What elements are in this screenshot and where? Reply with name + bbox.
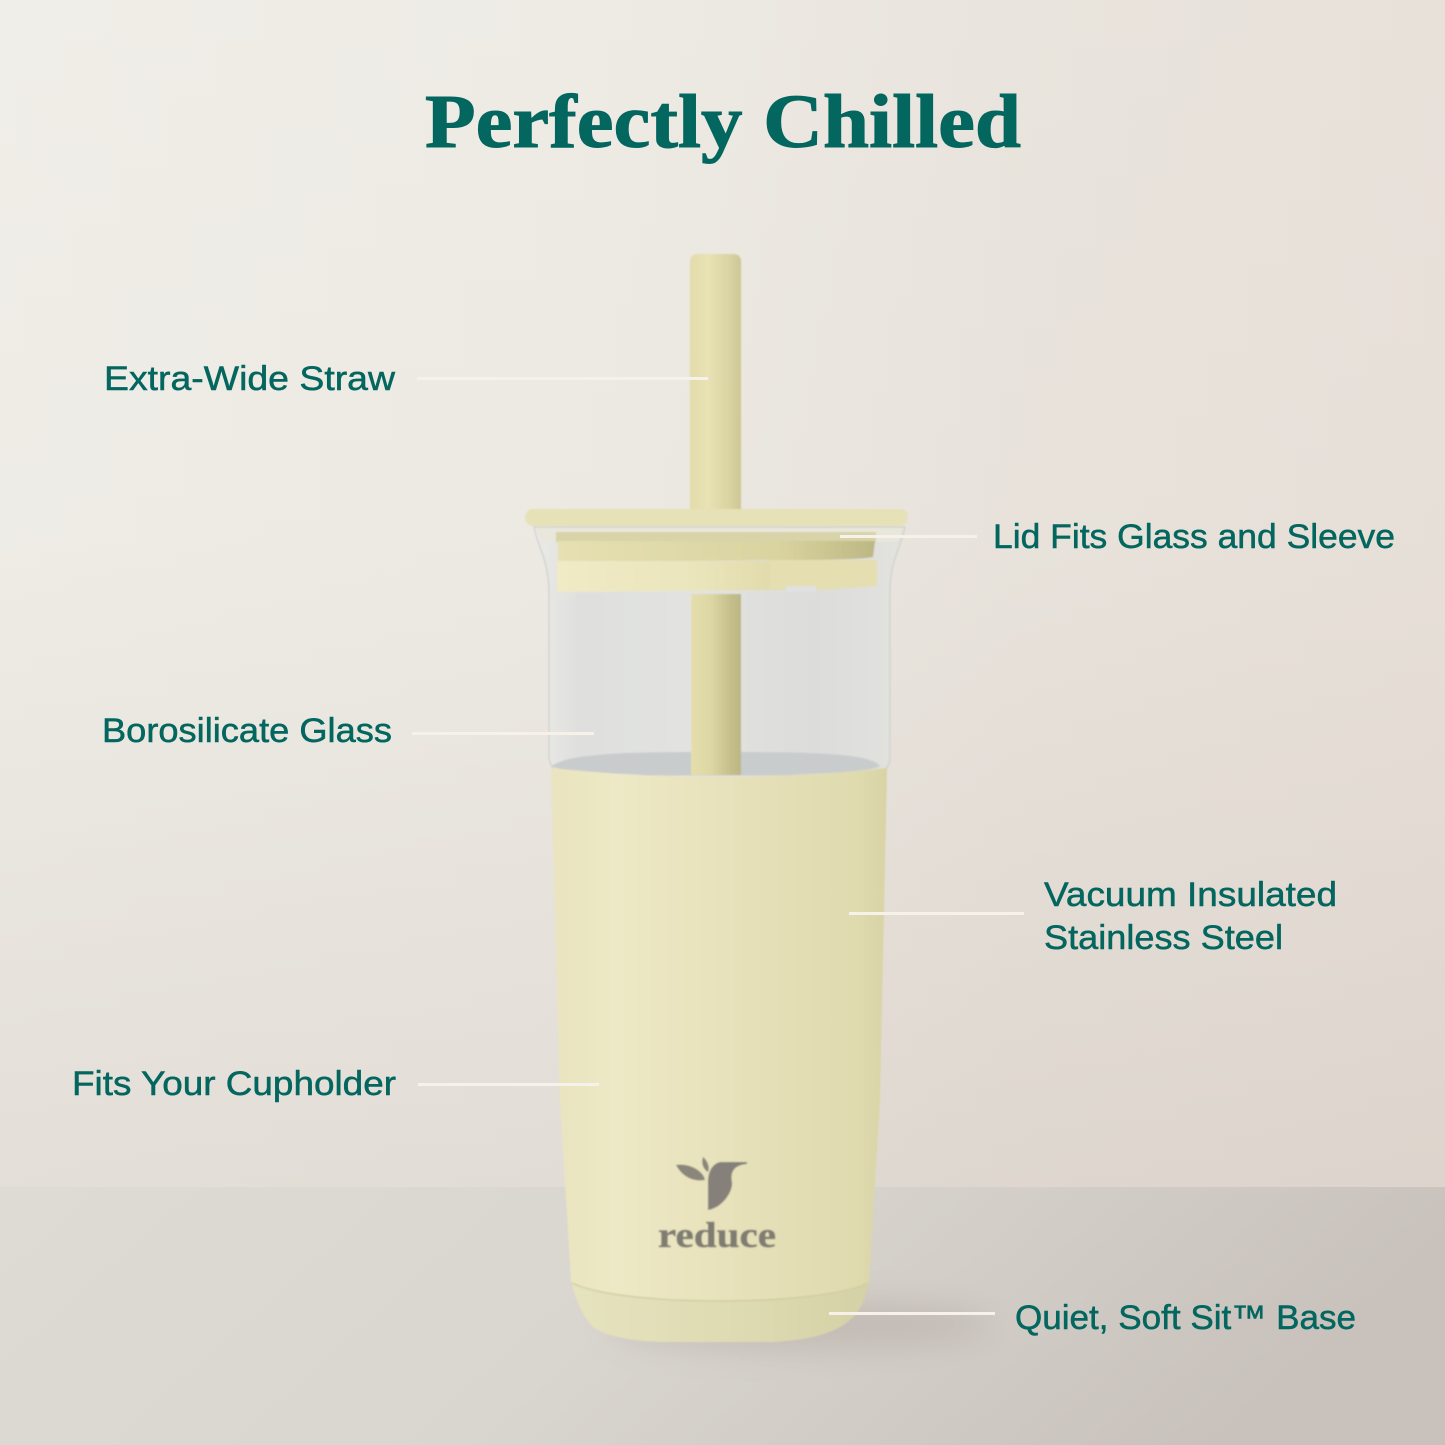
glass body: [534, 527, 905, 775]
straw: [690, 254, 741, 775]
callout: Fits Your Cupholder: [72, 1065, 599, 1103]
sleeve: [551, 768, 887, 1301]
callout: Vacuum Insulated Stainless Steel: Stainless Steel: [1044, 919, 1283, 957]
soft sit base: [571, 1270, 869, 1342]
callout: Vacuum Insulated Stainless Steel: Vacuum Insulated: [1044, 876, 1337, 914]
background floor: [0, 1187, 1445, 1445]
callout: Quiet, Soft Sit Base: [829, 1299, 1356, 1337]
logo: reduce: reduce: [658, 1215, 776, 1255]
callout: Borosilicate Glass: Borosilicate Glass: [102, 712, 392, 750]
callout: Borosilicate Glass: [102, 712, 594, 750]
tumbler product image: [525, 254, 908, 1342]
callout: Extra-Wide Straw: Extra-Wide Straw: [104, 360, 395, 398]
floor shadow: [610, 1301, 990, 1349]
callout: Lid Fits Glass and Sleeve: [840, 518, 1395, 556]
title: Perfectly Chilled: [425, 80, 1021, 164]
callout: Quiet, Soft Sit Base: Quiet, Soft Sit™ Base: [1015, 1299, 1356, 1337]
base seam: [572, 1283, 868, 1301]
lid: [525, 509, 908, 526]
callout: Fits Your Cupholder: Fits Your Cupholder: [72, 1065, 396, 1103]
callout: Lid Fits Glass and Sleeve: Lid Fits Glass and Sleeve: [993, 518, 1395, 556]
callout: Vacuum Insulated Stainless Steel: [849, 876, 1337, 957]
callout: Extra-Wide Straw: [104, 360, 708, 398]
logo: reduce: [658, 1157, 776, 1255]
lid inner plug: [556, 532, 877, 592]
